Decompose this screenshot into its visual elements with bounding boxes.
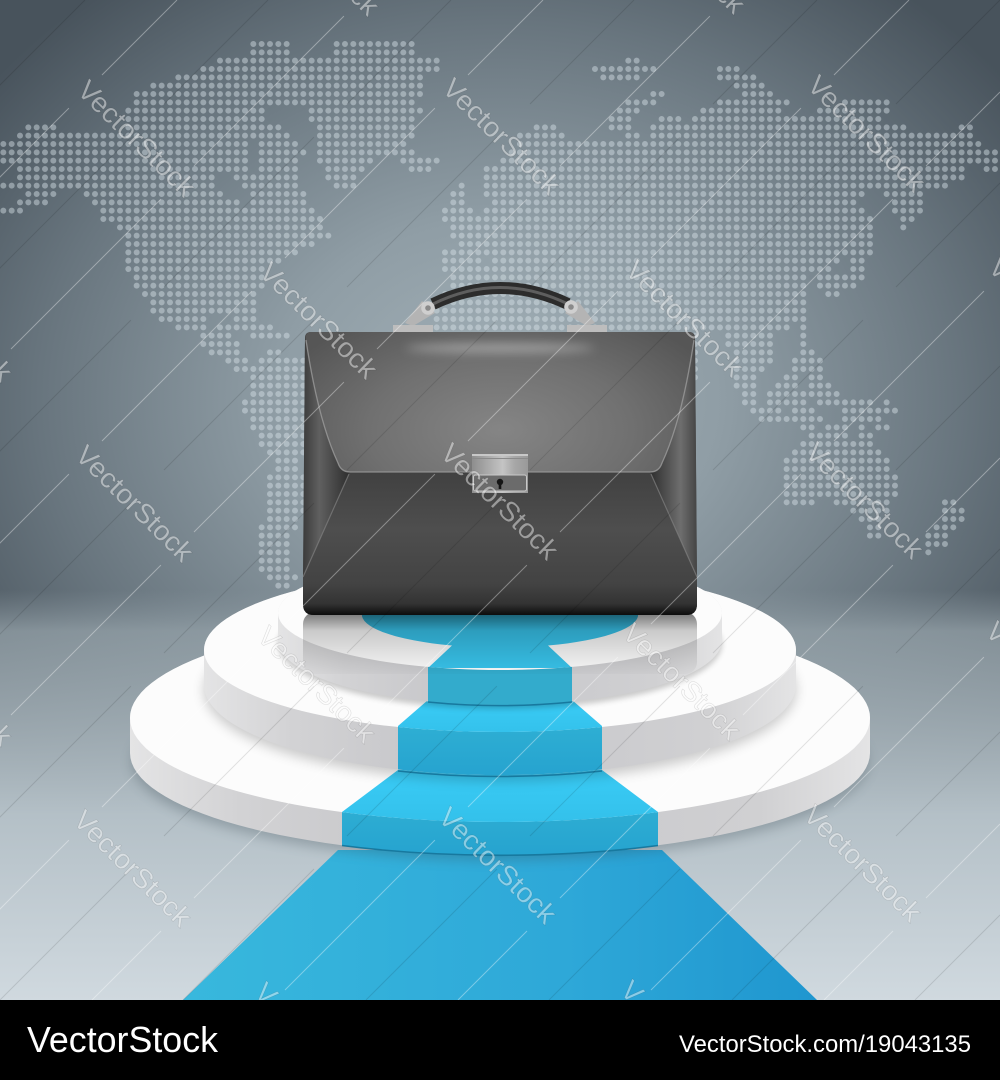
flap outline (306, 340, 694, 472)
watermark text: VectorStock (254, 256, 384, 385)
lower front panel (303, 473, 697, 615)
watermark text: VectorStock (617, 617, 747, 746)
watermark text: VectorStock (802, 69, 932, 198)
watermark text: VectorStock (68, 804, 198, 933)
flap highlight (405, 344, 595, 352)
clasp (472, 454, 528, 493)
watermark text: V (615, 974, 650, 1010)
briefcase (303, 288, 697, 615)
tier 1: top step (278, 586, 722, 706)
gusset seams (303, 474, 697, 577)
watermark text: VectorStock (800, 436, 930, 565)
handle (393, 288, 607, 332)
watermark text: VectorStock (433, 801, 563, 930)
watermark text: VectorStock (72, 74, 202, 203)
watermark text: VectorStock (70, 439, 200, 568)
tier 3: bottom step (130, 656, 870, 856)
right gusset (650, 338, 697, 577)
watermark text: VectorStock (437, 72, 567, 201)
footer image id: VectorStock.com/19043135 (679, 1031, 971, 1058)
case body (303, 332, 697, 615)
watermark text: VectorStock (252, 620, 382, 749)
watermark text: VectorStock (435, 437, 565, 566)
footer brand: VectorStock (27, 1019, 219, 1060)
dotted world map (3, 44, 995, 586)
watermark text: VectorStock (620, 254, 750, 383)
footer bar (0, 1000, 1000, 1080)
tier 2: middle step (204, 590, 796, 778)
podium (130, 556, 870, 860)
left gusset (303, 338, 350, 577)
watermark text: V (249, 976, 284, 1012)
briefcase reflection (303, 612, 697, 674)
upper flap (306, 332, 694, 472)
blue carpet on the floor (183, 850, 817, 1000)
watermark text: VectorStock (798, 799, 928, 928)
podium floor shadow (132, 664, 868, 860)
